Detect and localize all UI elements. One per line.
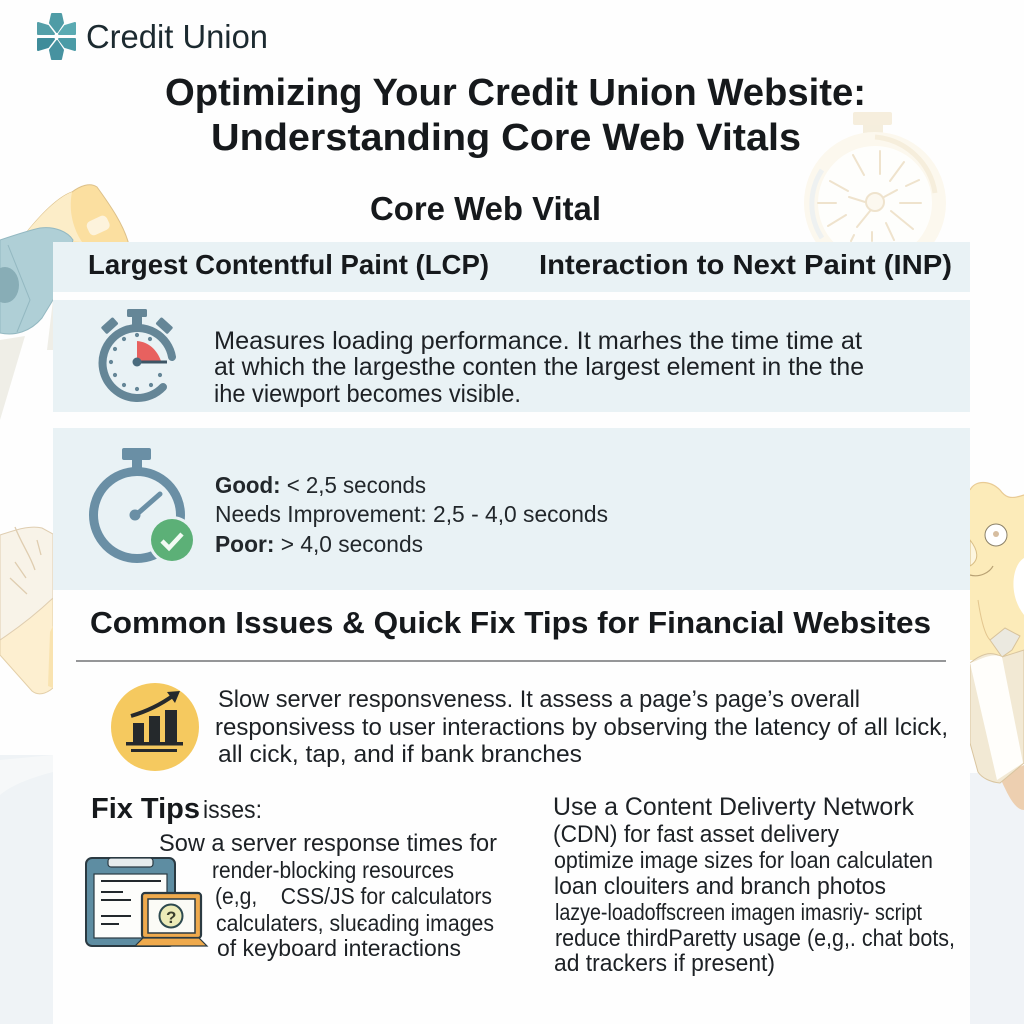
left fix list	[159, 830, 497, 961]
icon: clipboard and laptop: ?	[166, 908, 176, 927]
wordmark: Credit Union	[86, 18, 268, 55]
panel: metric name header	[53, 242, 970, 292]
threshold text: Poor: > 4,0 seconds	[215, 531, 423, 557]
description text: at which the largesthe conten the largest element in the the	[214, 353, 864, 381]
issue text: responsivess to user interactions by observing the latency of all lcick,	[215, 714, 948, 741]
issue text: all cick, tap, and if bank branches	[218, 741, 582, 768]
icon: stopwatch with red sector	[101, 309, 173, 398]
right fix list	[553, 793, 955, 977]
left fix list: render-blocking resources	[212, 857, 454, 883]
right fix list: loan clouiters and branch photos	[554, 873, 886, 900]
left fix list: calculaters, sluєading images	[216, 910, 494, 936]
title	[165, 72, 866, 159]
right fix list: Use a Content Deliverty Network	[553, 793, 914, 821]
left fix list: of keyboard interactions	[217, 935, 461, 961]
subheading: Core Web Vital: Core Web Vital	[370, 190, 601, 227]
panel: LCP description	[53, 300, 970, 412]
label: LCP: Largest Contentful Paint (LCP)	[88, 249, 489, 280]
left fix list: (e,g, CSS/JS for calculators	[215, 883, 492, 909]
right fix list: optimize image sizes for loan calculaten	[554, 847, 933, 873]
logo: Credit Union	[38, 14, 268, 59]
right fix list: (CDN) for fast asset delivery	[553, 821, 839, 848]
description text: ihe viewport becomes visible.	[214, 380, 521, 408]
right background band	[970, 773, 1024, 1024]
section heading: Common Issues & Quick Fix Tips for Financial Websites	[90, 605, 931, 640]
icon: stopwatch with green check	[94, 448, 196, 564]
issue block: slow server	[111, 683, 948, 771]
fix tips heading: Fix Tips	[91, 793, 200, 825]
decorative left illustration: blue shape	[0, 228, 73, 420]
right fix list: lazye-loadoffscreen imagen imasriy- script	[555, 899, 923, 925]
panel: LCP thresholds	[53, 428, 970, 590]
fix tips heading: isses:	[203, 796, 262, 824]
title: Understanding Core Web Vitals	[211, 117, 801, 159]
left background band	[0, 755, 53, 1024]
right fix list: reduce thirdParetty usage (e,g,. chat bots,	[555, 925, 955, 952]
right fix list: ad trackers if present)	[554, 950, 775, 977]
decorative left illustration: cream shape	[0, 527, 53, 694]
left fix list: Sow a server response times for	[159, 830, 497, 857]
fix tips heading	[91, 793, 262, 825]
threshold text: Good: < 2,5 seconds	[215, 472, 426, 498]
decorative left illustration: yellow shape	[22, 185, 129, 245]
main white column	[53, 242, 970, 1024]
label: INP: Interaction to Next Paint (INP)	[539, 249, 952, 280]
description text: Measures loading performance. It marhes the time time at	[214, 327, 862, 355]
icon: rising bar chart	[111, 683, 199, 771]
issue text	[215, 686, 948, 768]
threshold text: Needs Improvement: 2,5 - 4,0 seconds	[215, 501, 608, 527]
description text	[214, 327, 864, 408]
decorative stopwatch illustration	[811, 112, 939, 267]
decorative right illustration: bear and pencil	[970, 482, 1024, 810]
threshold text	[215, 472, 608, 557]
icon: teal flower logo	[38, 14, 75, 59]
issue text: Slow server responsveness. It assess a page’s page’s overall	[218, 686, 860, 713]
icon: clipboard and laptop	[86, 858, 207, 946]
title: Optimizing Your Credit Union Website:	[165, 72, 866, 114]
